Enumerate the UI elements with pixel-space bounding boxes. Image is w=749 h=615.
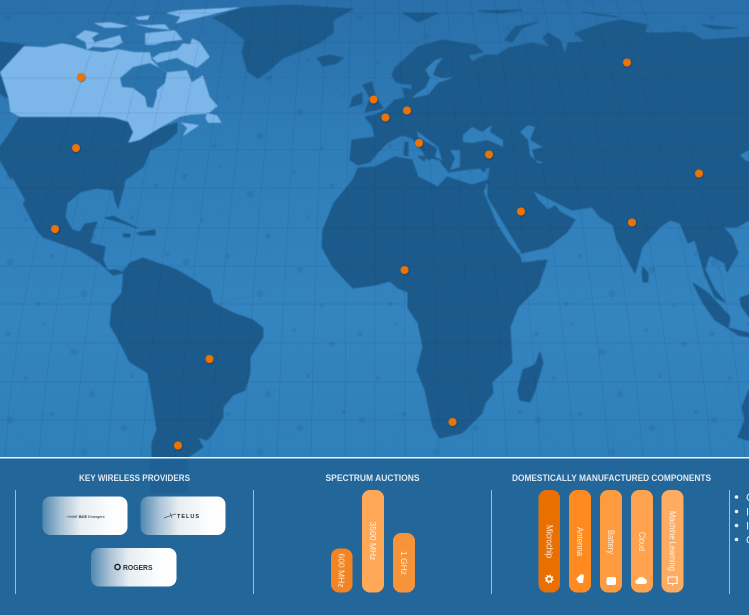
card: Telus: TELUS <box>177 514 200 520</box>
world map: land masses <box>0 5 749 458</box>
bar: Cloud: Cloud <box>637 532 647 551</box>
water: Baltic Sea <box>412 58 455 98</box>
pin: United States <box>72 144 80 152</box>
icon: cloud <box>635 577 647 584</box>
map location pins <box>51 58 703 450</box>
bar: Antenna: Antenna <box>575 527 585 556</box>
land: Eurasia <box>350 20 749 302</box>
Arctic archipelago <box>75 7 243 68</box>
pin: France <box>382 114 390 122</box>
card: BCE <box>42 496 128 535</box>
land: Caribbean islands <box>105 216 155 237</box>
land: Mediterranean islands <box>404 142 486 172</box>
water: Yellow Sea <box>740 150 749 162</box>
bar: 600 MHz: 600 MHz <box>336 553 346 588</box>
pin: South Africa <box>448 418 456 426</box>
pin: Russia <box>623 58 631 66</box>
bar: Microchip <box>538 490 560 592</box>
water: Aegean Sea <box>450 150 460 170</box>
bullet list, clipped at page edge <box>735 492 749 546</box>
pin: Brazil <box>206 355 214 363</box>
land: North and Central America <box>0 117 177 275</box>
pin: Mexico <box>51 225 59 233</box>
card: BCE: BCE Emergent <box>79 515 105 519</box>
card: Rogers <box>91 548 176 586</box>
icon: gear <box>545 575 553 583</box>
land: British Isles <box>350 82 383 112</box>
panel dividers <box>16 490 730 594</box>
heading: key wireless providers: KEY WIRELESS PROVIDERS <box>79 473 190 484</box>
heading: domestically manufactured components: DOMESTICALLY MANUFACTURED COMPONENTS <box>512 473 711 484</box>
land: Iceland <box>317 55 343 66</box>
water: Gulf of California <box>10 177 25 205</box>
pin: Saudi Arabia <box>517 208 525 216</box>
map: Canada highlighted <box>0 7 243 143</box>
pin: China <box>695 170 703 178</box>
pin: Canada <box>77 73 85 81</box>
bottom panel <box>0 457 749 615</box>
spectrum auctions bars <box>331 490 415 592</box>
bar: Machine Learning <box>662 490 684 592</box>
bar: Microchip: Microchip <box>544 525 554 558</box>
map graticule <box>0 0 749 458</box>
inland seas <box>10 58 749 205</box>
bar: Battery: Battery <box>606 530 616 554</box>
pin: United Kingdom <box>370 96 378 104</box>
land: Alaska <box>0 42 25 97</box>
pin: India <box>628 218 636 226</box>
bar: 3500 MHz: 3500 MHz <box>368 522 378 560</box>
map background: ocean <box>0 0 749 458</box>
Hudson Bay <box>120 63 167 108</box>
bar: Antenna <box>569 490 591 592</box>
water: Adriatic Sea <box>417 131 442 160</box>
land: Australia <box>738 390 749 440</box>
icon: antenna <box>576 574 584 583</box>
manufactured components bars <box>538 490 684 592</box>
icon: monitor <box>668 577 677 586</box>
Newfoundland and Nova Scotia <box>180 113 222 137</box>
pin: Nigeria <box>400 266 408 274</box>
bullet list, clipped at page edge: I <box>746 506 749 518</box>
card: Telus <box>140 496 226 535</box>
pin: Turkey <box>485 150 493 158</box>
land: Southeast Asia islands <box>693 283 749 337</box>
land: Madagascar <box>518 352 543 402</box>
pin: Argentina <box>174 442 182 450</box>
land: Sri Lanka <box>642 267 648 282</box>
card: Rogers: ROGERS <box>123 563 152 572</box>
bar: Battery <box>600 490 622 592</box>
bar: 1 GHz: 1 GHz <box>399 551 409 575</box>
bullet list, clipped at page edge: I <box>746 520 749 532</box>
land: Africa <box>322 157 547 438</box>
bar: Machine Learning: Machine Learning <box>668 511 678 571</box>
water: Caspian Sea <box>520 125 545 163</box>
land: South America <box>110 258 263 458</box>
bar: Cloud <box>631 490 653 592</box>
provider cards <box>42 496 226 586</box>
pin: Italy <box>415 139 423 147</box>
heading: spectrum auctions: SPECTRUM AUCTIONS <box>326 473 420 484</box>
land: Greenland <box>213 5 353 78</box>
Canada mainland <box>0 43 218 143</box>
icon: battery <box>606 577 616 585</box>
land: Arctic islands <box>403 10 737 42</box>
pin: Germany <box>403 106 411 114</box>
water: Black Sea <box>463 125 503 147</box>
